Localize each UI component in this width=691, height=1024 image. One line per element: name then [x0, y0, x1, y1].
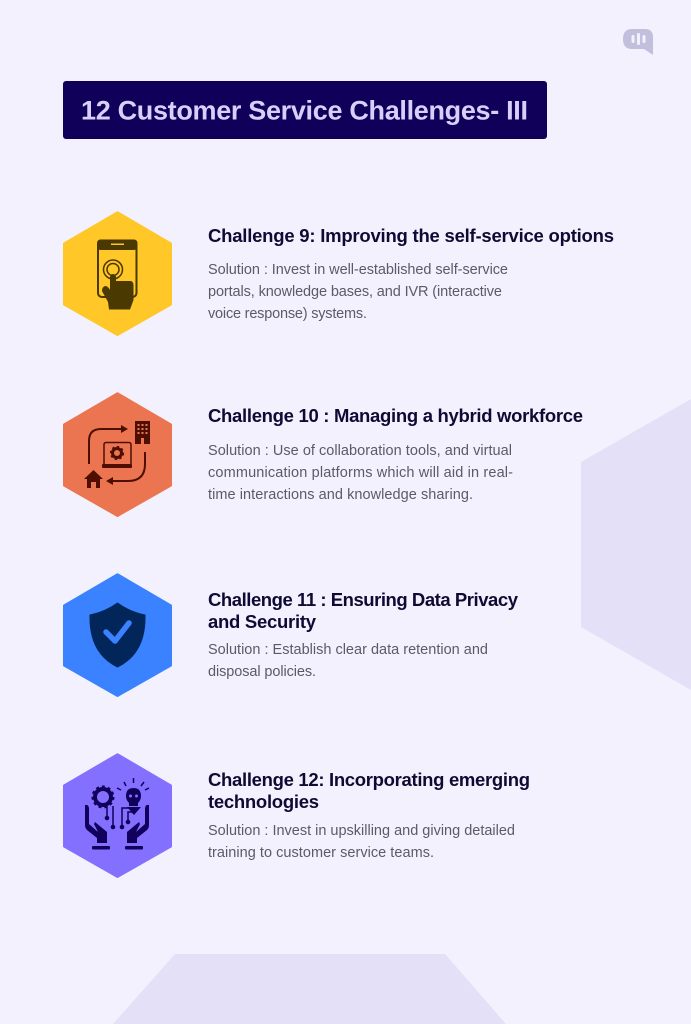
icon: logo speech bubble	[623, 29, 653, 55]
heading: technologies	[208, 791, 319, 812]
heading: and Security	[208, 611, 317, 632]
title banner	[63, 81, 547, 139]
icon: yellow hexagon with phone touch	[64, 212, 171, 335]
solution text	[208, 823, 515, 861]
icon: orange hexagon with hybrid work	[64, 393, 171, 516]
solution text: Solution : Establish clear data retention and	[208, 642, 488, 658]
solution text: communication platforms which will aid in real-	[208, 465, 513, 481]
heading: Challenge 9: Improving the self-service options	[208, 225, 614, 246]
icon: purple hexagon with hands, gear and bulb	[64, 754, 171, 877]
solution text: portals, knowledge bases, and IVR (interactive	[208, 284, 502, 300]
solution text: voice response) systems.	[208, 306, 367, 322]
solution text	[208, 262, 508, 322]
solution text	[208, 443, 513, 503]
panel: challenge 10	[64, 393, 583, 516]
heading: Challenge 11 : Ensuring Data Privacy	[208, 589, 519, 610]
solution text: training to customer service teams.	[208, 845, 434, 861]
heading: Challenge 12: Incorporating emerging	[208, 769, 530, 790]
heading	[208, 769, 530, 812]
solution text: disposal policies.	[208, 664, 316, 680]
solution text: Solution : Use of collaboration tools, and virtual	[208, 443, 512, 459]
panel: challenge 9	[64, 212, 614, 335]
solution text: Solution : Invest in well-established self-service	[208, 262, 508, 278]
solution text	[208, 642, 488, 680]
solution text: Solution : Invest in upskilling and giving detailed	[208, 823, 515, 839]
solution text: time interactions and knowledge sharing.	[208, 487, 473, 503]
heading	[208, 589, 519, 632]
icon: blue hexagon with shield	[64, 574, 171, 696]
title banner: 12 Customer Service Challenges- III	[81, 96, 528, 126]
decorative trapezoid bottom	[113, 954, 506, 1024]
heading: Challenge 10 : Managing a hybrid workforce	[208, 405, 583, 426]
panel: challenge 11	[64, 574, 519, 696]
panel: challenge 12	[64, 754, 530, 877]
decorative hexagon right	[581, 399, 691, 690]
